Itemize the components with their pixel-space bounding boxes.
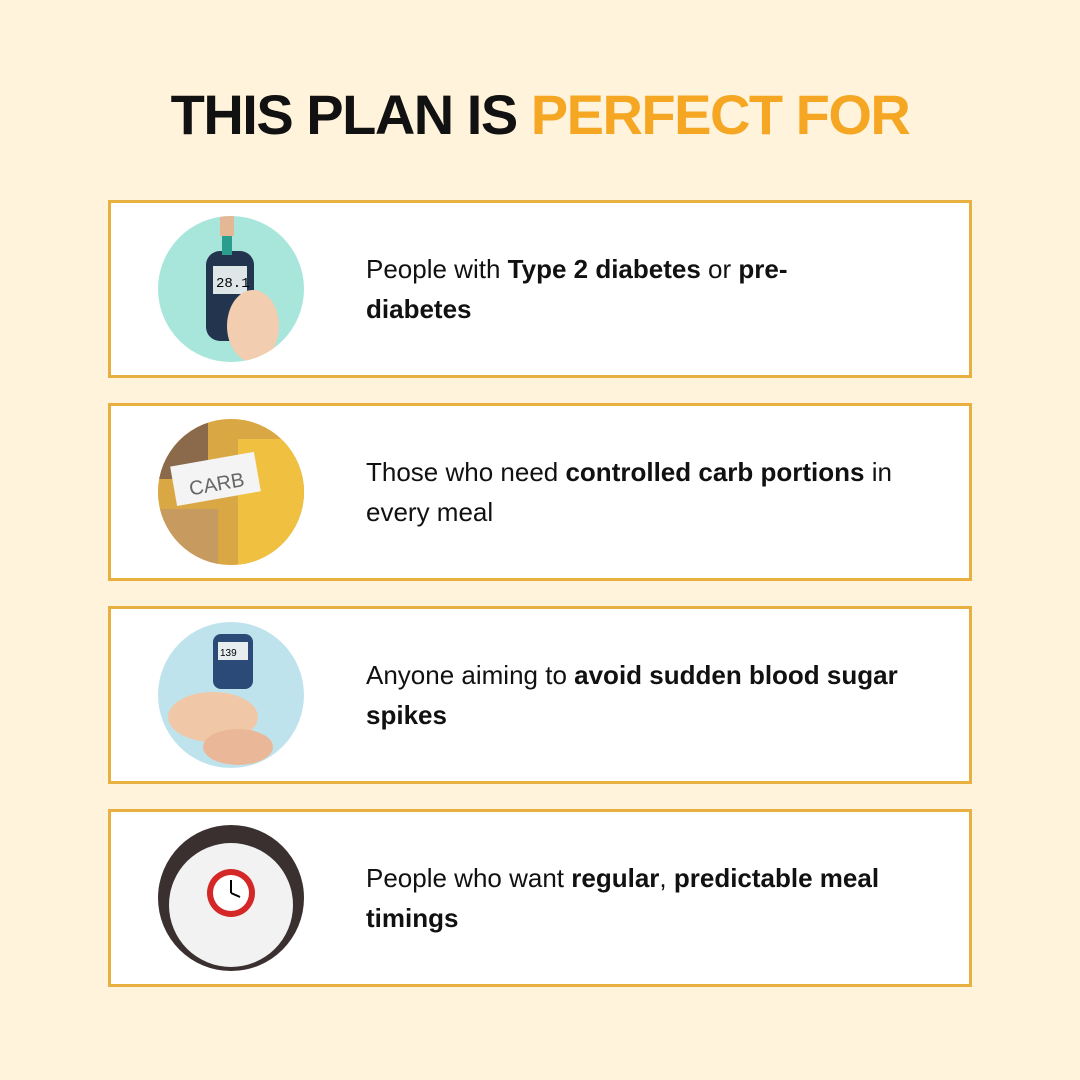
text: every meal	[366, 497, 493, 527]
title: THIS PLAN IS PERFECT FOR	[171, 83, 909, 146]
photo: finger test	[158, 622, 304, 768]
photo: carbs	[158, 419, 304, 565]
card: type 2 diabetes	[108, 200, 972, 378]
photo: clock on plate	[158, 825, 304, 971]
text: spikes	[366, 700, 447, 730]
card: carb portions	[108, 403, 972, 581]
photo: glucose meter	[158, 216, 304, 362]
text: People with Type 2 diabetes or pre-	[366, 254, 788, 284]
text	[366, 863, 879, 933]
text	[366, 660, 898, 730]
card: meal timings	[108, 809, 972, 987]
text	[366, 254, 788, 324]
text: timings	[366, 903, 458, 933]
photo: glucose meter: 28.1	[216, 276, 250, 292]
photo: carbs: CARB	[188, 469, 246, 500]
text: People who want regular, predictable meal	[366, 863, 879, 893]
card: blood sugar spikes	[108, 606, 972, 784]
text: Those who need controlled carb portions in	[366, 457, 892, 487]
text: diabetes	[366, 294, 472, 324]
text: Anyone aiming to avoid sudden blood sugar	[366, 660, 898, 690]
photo: finger test: 139	[220, 648, 237, 659]
text	[366, 457, 892, 527]
